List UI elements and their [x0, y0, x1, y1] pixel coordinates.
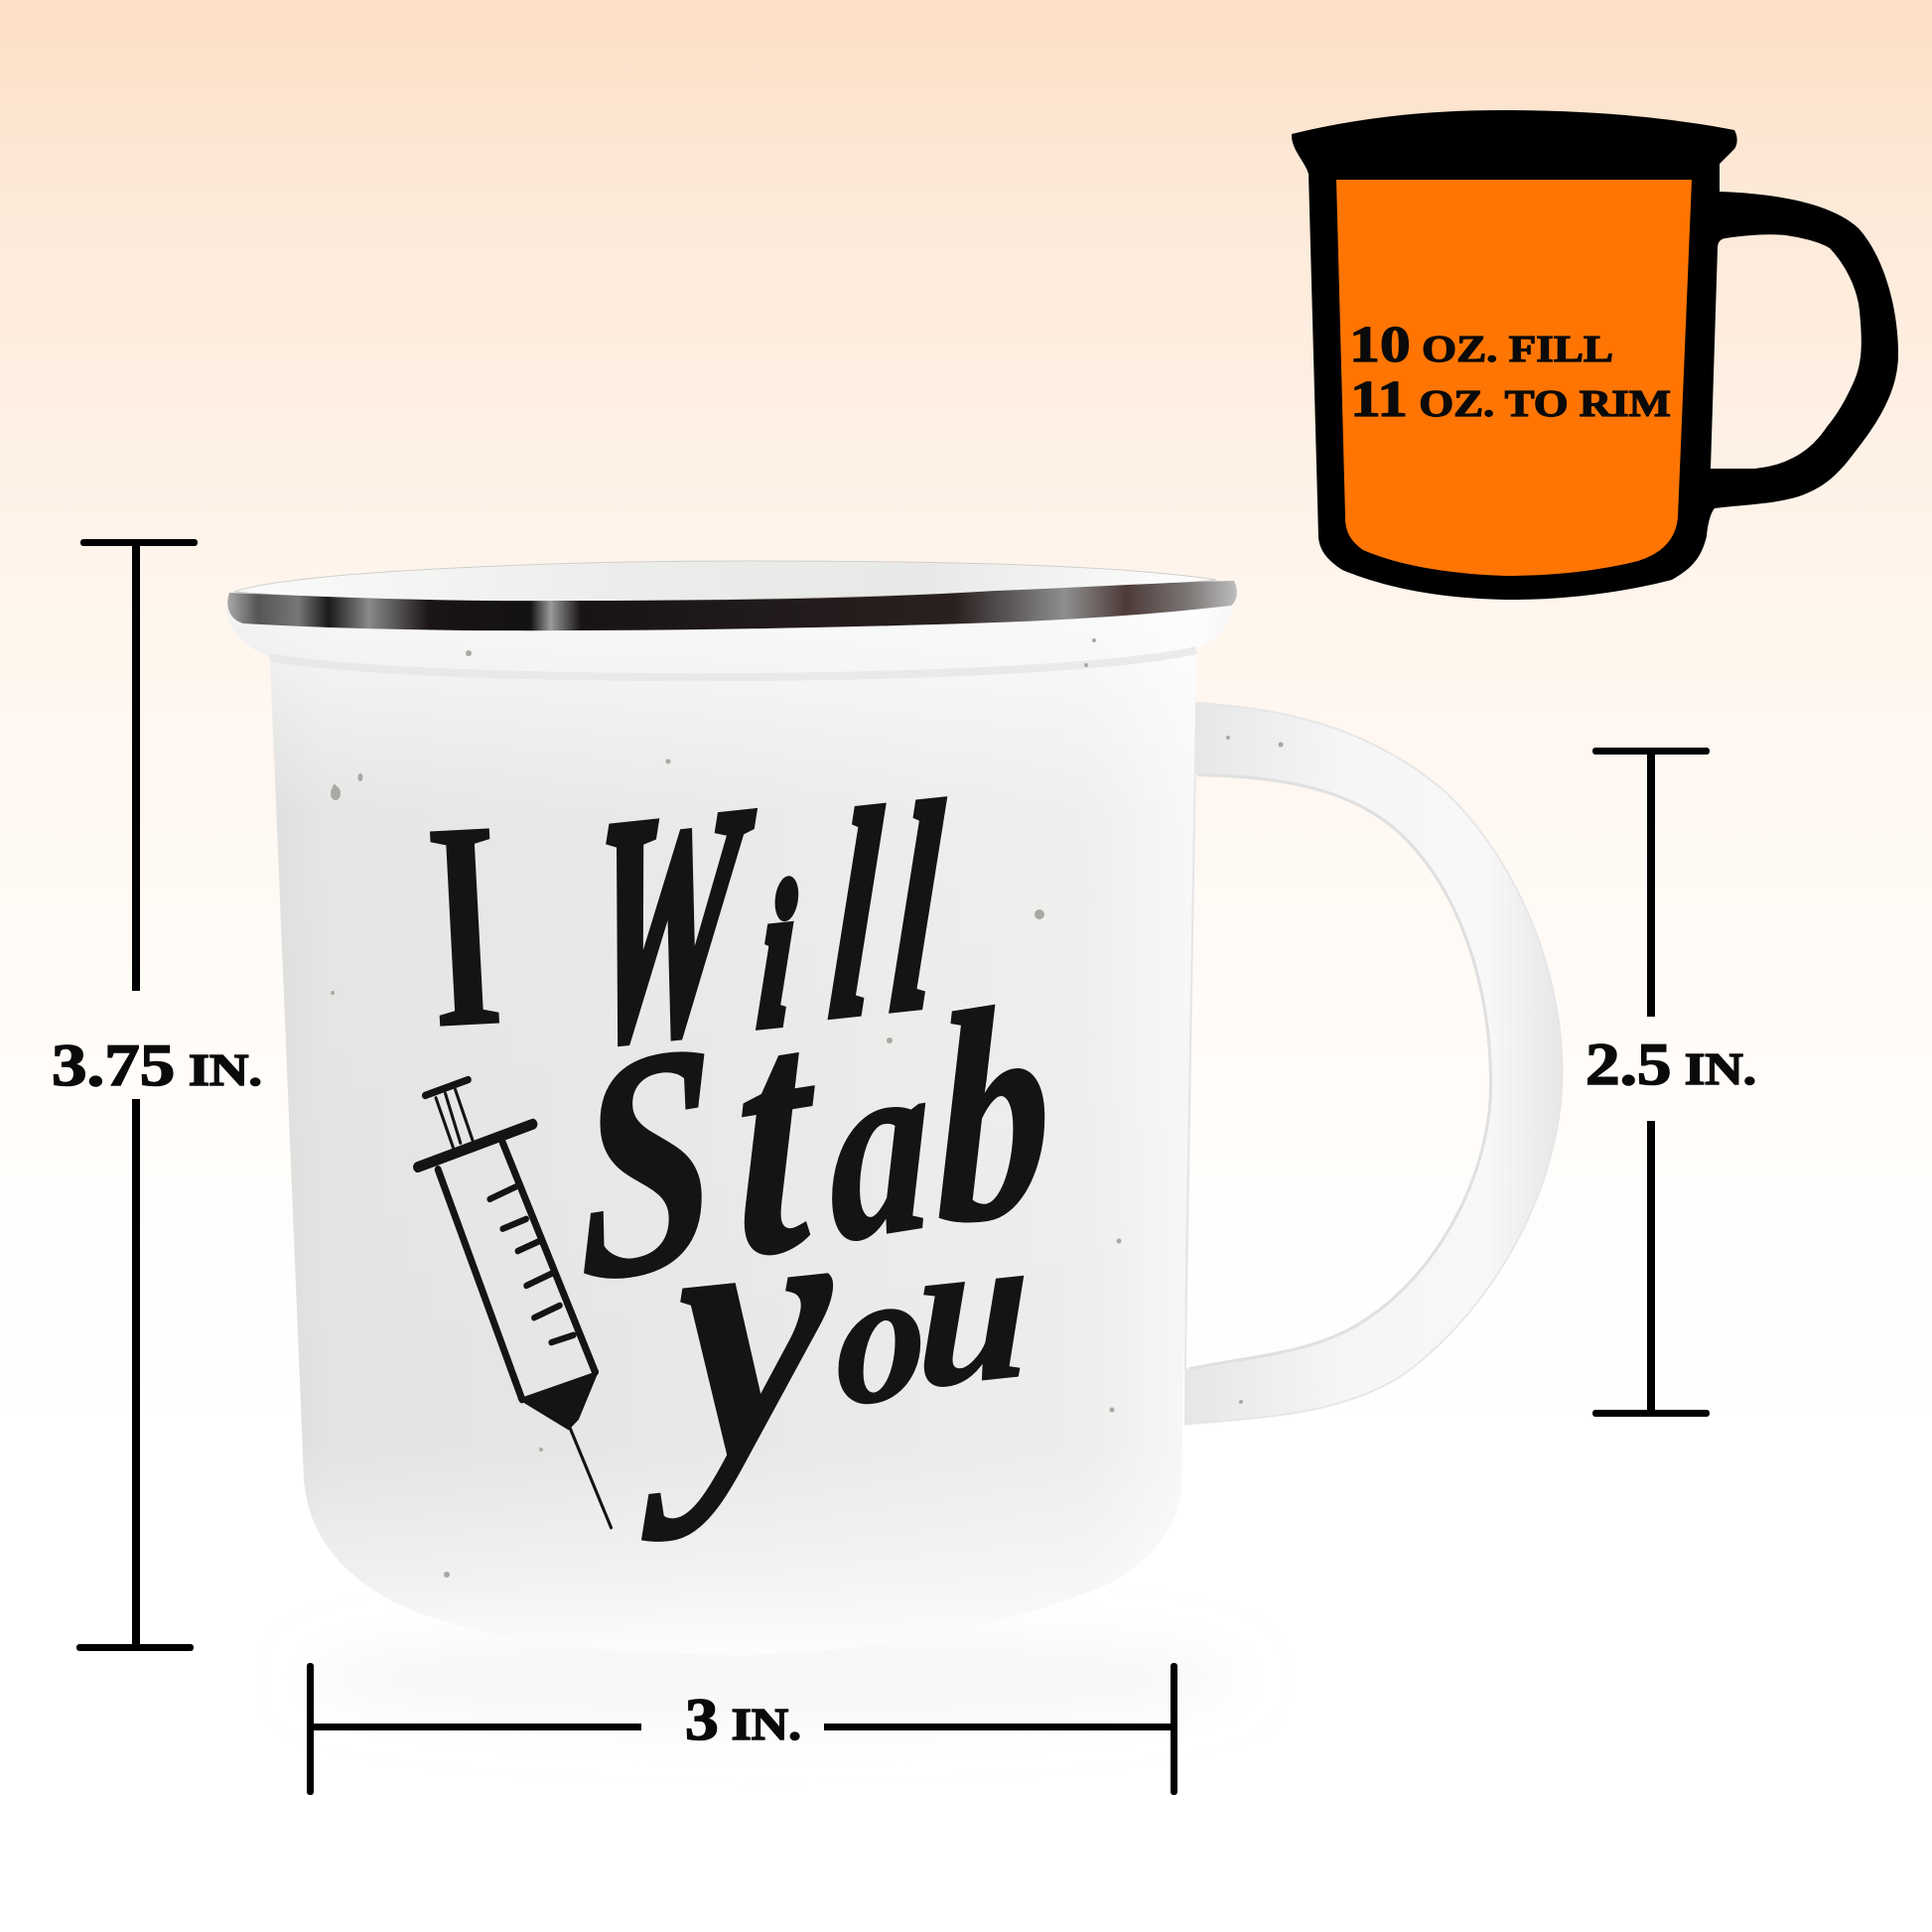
mug lettering: Will: l: [885, 745, 948, 1072]
capacity icon: mug silhouette: [1292, 110, 1898, 600]
mug body: [225, 604, 1232, 1655]
mug lettering: you: u: [917, 1184, 1030, 1434]
mug shadow: [308, 1628, 1241, 1727]
orange fill area: [1336, 180, 1692, 576]
label: 3 IN.: [685, 1687, 801, 1752]
silver rim band: [227, 581, 1237, 630]
mug lettering: Stab: S: [576, 975, 718, 1351]
silhouette: [1292, 110, 1898, 600]
dimension: width 3 in.: [307, 1663, 1177, 1795]
dimension: handle height 2.5 in.: [1586, 748, 1756, 1417]
mug lettering: Will: l: [823, 752, 888, 1078]
mug interior: [234, 561, 1216, 602]
product photo: white enamel mug: [225, 561, 1563, 1727]
capacity text: fill: 10 OZ. FILL: [1349, 317, 1613, 373]
mug lettering: you: o: [837, 1227, 925, 1447]
mug lettering: Will: W: [579, 738, 760, 1110]
lip shading: [270, 650, 1196, 677]
syringe icon: [418, 1080, 612, 1528]
mug lettering: Stab: t: [733, 941, 820, 1330]
mug lettering: Stab: a: [828, 993, 932, 1298]
mug lettering: you: y: [639, 1114, 834, 1544]
mug lettering: I: I: [420, 759, 509, 1091]
speckles: [331, 638, 1283, 1578]
label: 2.5 IN.: [1586, 1032, 1756, 1097]
mug handle: [1185, 702, 1563, 1425]
mug lettering: Will: i: [756, 846, 798, 1065]
body light overlay: [225, 604, 1232, 1655]
mug lettering: Stab: b: [932, 938, 1053, 1290]
capacity text: rim: 11 OZ. TO RIM: [1350, 371, 1671, 428]
label: 3.75 IN.: [52, 1033, 262, 1098]
dimension: height 3.75 in.: [52, 539, 262, 1651]
